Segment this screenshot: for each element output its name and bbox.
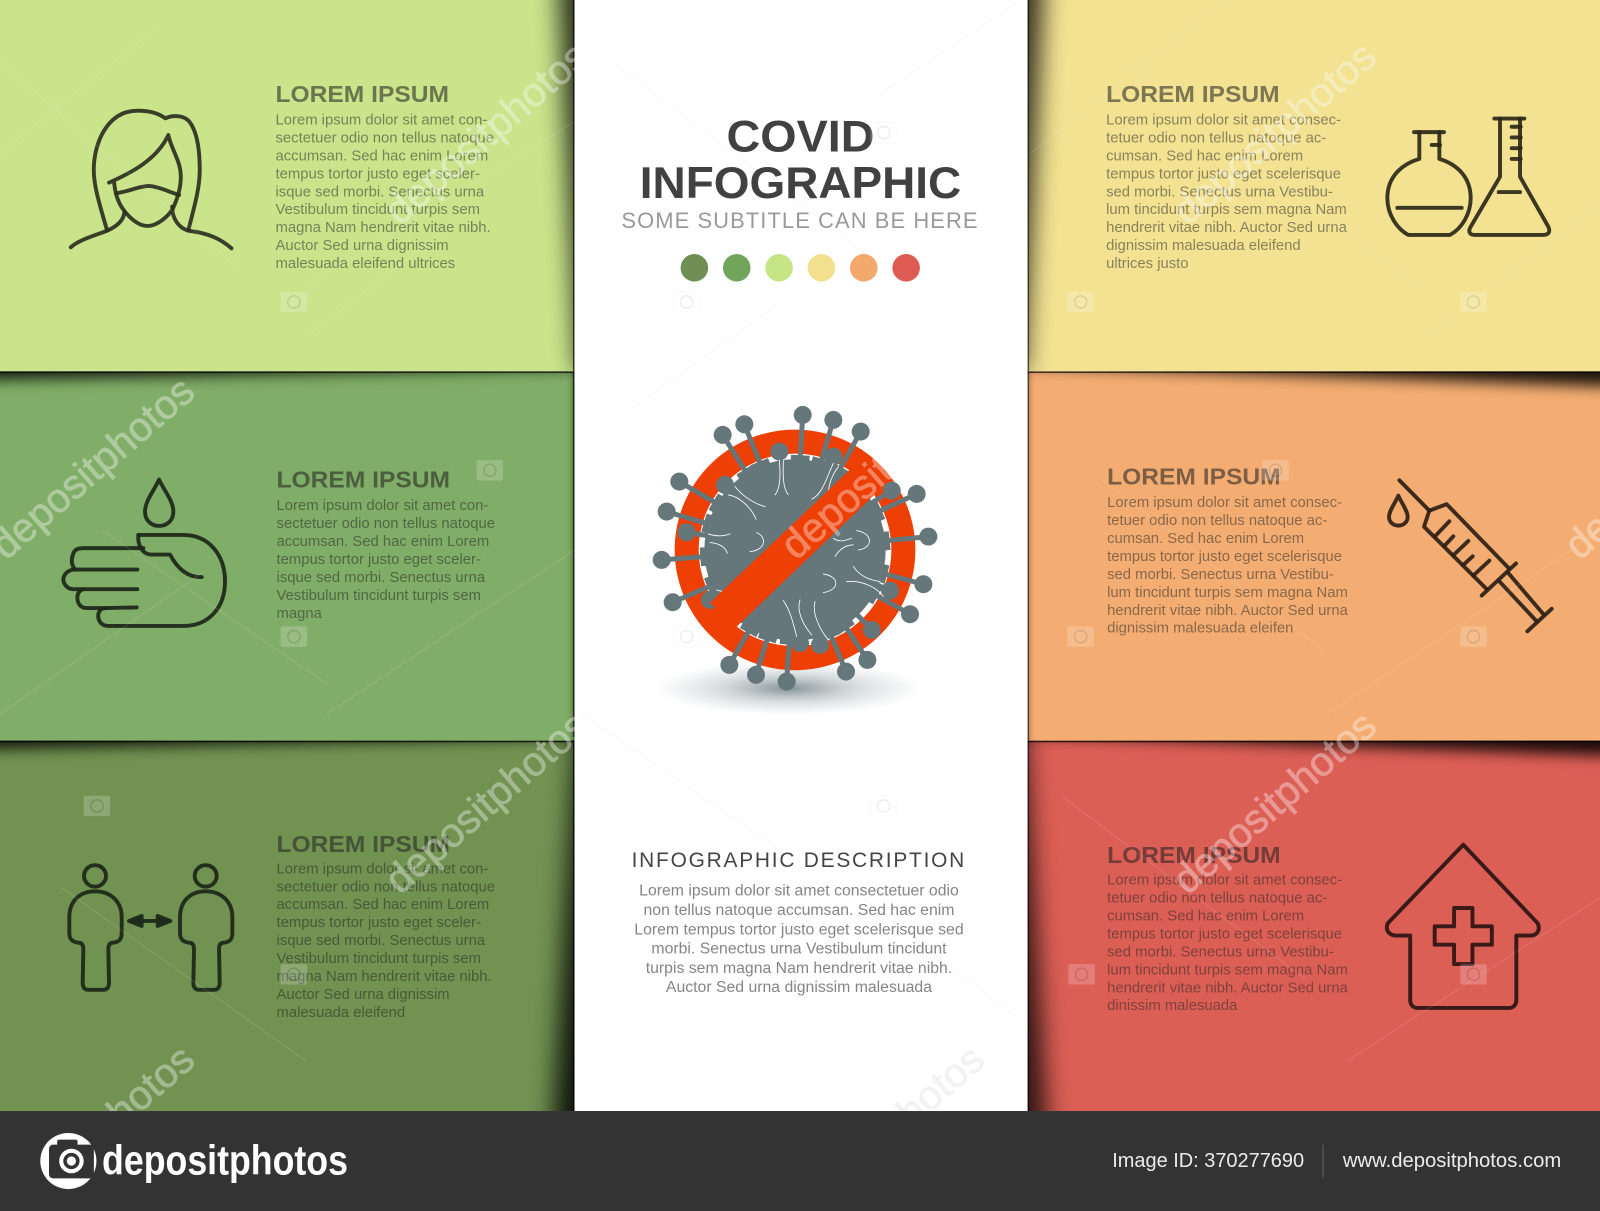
description text: morbi. Senectus urna Vestibulum tincidunt [651, 941, 947, 958]
heading: panel 6: LOREM IPSUM [1107, 842, 1281, 868]
watermark overlay: depositphotos [376, 33, 597, 233]
watermark overlay: depositphotos [376, 702, 597, 903]
text block: panel 6: cumsan. Sed hac enim Lorem [1107, 908, 1304, 924]
panel: face mask (light green) [0, 0, 574, 372]
footer bar [0, 1111, 1600, 1211]
text block: panel 4: sed morbi. Senectus urna Vestibu- [1106, 184, 1333, 200]
text block: panel 1: magna Nam hendrerit vitae nibh. [276, 220, 491, 236]
text block: panel 2: tempus tortor justo eget sceler- [277, 552, 481, 568]
watermark overlay: depositphotos [1163, 33, 1385, 233]
description text: non tellus natoque accumsan. Sed hac enim [644, 902, 954, 919]
text block: panel 3: Vestibulum tincidunt turpis sem [277, 951, 481, 967]
text block: panel 5: lum tincidunt turpis sem magna Nam [1107, 585, 1348, 601]
description text: turpis sem magna Nam hendrerit vitae nibh. [646, 960, 952, 977]
text block: panel 4: Lorem ipsum dolor sit amet consec- [1106, 112, 1341, 128]
heading: panel 1: LOREM IPSUM [276, 81, 449, 107]
text block: panel 4: tetuer odio non tellus natoque ac- [1106, 130, 1326, 146]
panel: vaccine (orange) [1028, 371, 1600, 741]
panel: home care (red) [1028, 740, 1600, 1111]
icon: woman wearing mask [71, 111, 232, 248]
icon: house with medical cross [1387, 845, 1539, 1008]
heading: panel 3: LOREM IPSUM [277, 831, 450, 857]
text block: panel 1: sectetuer odio non tellus natoque [276, 130, 494, 146]
colour dots legend [681, 254, 920, 282]
text block: panel 2: Vestibulum tincidunt turpis sem [277, 588, 481, 604]
text block: panel 4: dignissim malesuada eleifend [1106, 238, 1301, 254]
text block: panel 5: tempus tortor justo eget scelerisque [1107, 549, 1342, 565]
icon: depositphotos logo [40, 1133, 96, 1189]
text block: panel 1: Lorem ipsum dolor sit amet con- [276, 112, 487, 128]
title: INFOGRAPHIC [640, 157, 961, 208]
panel: social distancing (dark green) [0, 740, 574, 1111]
text block: panel 1: isque sed morbi. Senectus urna [276, 184, 485, 200]
text block: panel 5: tetuer odio non tellus natoque ac- [1107, 513, 1327, 529]
panel: lab flasks (yellow) [1028, 0, 1600, 372]
image id: Image ID: 370277690 [1112, 1150, 1304, 1172]
text block: panel 4: ultrices justo [1106, 256, 1189, 272]
icon: two people keeping distance [69, 865, 232, 990]
icon: lab flasks [1387, 119, 1549, 235]
text block: panel 3: magna Nam hendrerit vitae nibh. [277, 969, 492, 985]
text block: panel 6: dinissim malesuada [1107, 998, 1238, 1014]
icon: crossed-out coronavirus [653, 406, 937, 715]
description heading: INFOGRAPHIC DESCRIPTION [632, 849, 964, 872]
text block: panel 3: sectetuer odio non tellus natoque [277, 879, 495, 895]
text block: panel 6: hendrerit vitae nibh. Auctor Sed urna [1107, 980, 1349, 996]
description text: Lorem ipsum dolor sit amet consectetuer odio [639, 883, 959, 900]
text block: panel 3: malesuada eleifend [277, 1005, 405, 1021]
text block: panel 4: lum tincidunt turpis sem magna Nam [1106, 202, 1347, 218]
text block: panel 1: accumsan. Sed hac enim Lorem [276, 148, 488, 164]
description text: Auctor Sed urna dignissim malesuada [666, 979, 932, 996]
panel: centre column [574, 0, 1028, 1111]
heading: panel 5: LOREM IPSUM [1107, 464, 1281, 490]
title [640, 111, 961, 208]
logo wordmark: depositphotos [102, 1136, 348, 1183]
watermark overlay: depositphotos [1163, 702, 1385, 903]
icon: hand with water drop [63, 480, 225, 626]
text block: panel 5: Lorem ipsum dolor sit amet consec- [1107, 495, 1342, 511]
text block: panel 2: isque sed morbi. Senectus urna [277, 570, 486, 586]
title: COVID [727, 111, 874, 162]
panel: hand washing (mid green) [0, 371, 574, 741]
watermark overlay: depositphotos [772, 367, 993, 568]
text block: panel 2: Lorem ipsum dolor sit amet con- [277, 498, 488, 514]
text block: panel 1: tempus tortor justo eget sceler- [276, 166, 480, 182]
text block: panel 3: tempus tortor justo eget sceler- [277, 915, 481, 931]
text block: panel 1: malesuada eleifend ultrices [276, 256, 455, 272]
text block: panel 3: isque sed morbi. Senectus urna [277, 933, 486, 949]
text block: panel 5: dignissim malesuada eleifen [1107, 621, 1293, 637]
text block: panel 2: sectetuer odio non tellus natoque [277, 516, 495, 532]
text block: panel 4: tempus tortor justo eget scelerisque [1106, 166, 1341, 182]
text block: panel 5: sed morbi. Senectus urna Vestibu- [1107, 567, 1334, 583]
text block: panel 6: Lorem ipsum dolor sit amet consec- [1107, 873, 1342, 889]
website url: www.depositphotos.com [1342, 1150, 1561, 1172]
text block: panel 6: lum tincidunt turpis sem magna Nam [1107, 962, 1348, 978]
text block: panel 2: magna [277, 606, 323, 622]
text block: panel 2: accumsan. Sed hac enim Lorem [277, 534, 489, 550]
text block: panel 6: tempus tortor justo eget scelerisque [1107, 926, 1342, 942]
text block: panel 1: Vestibulum tincidunt turpis sem [276, 202, 480, 218]
text block: panel 4: hendrerit vitae nibh. Auctor Sed urna [1106, 220, 1348, 236]
icon: syringe [1389, 480, 1552, 631]
heading: panel 2: LOREM IPSUM [277, 467, 450, 493]
text block: panel 6: sed morbi. Senectus urna Vestibu- [1107, 944, 1334, 960]
text block: panel 3: Auctor Sed urna dignissim [277, 987, 450, 1003]
text block: panel 6: tetuer odio non tellus natoque ac- [1107, 890, 1327, 906]
text block: panel 3: Lorem ipsum dolor sit amet con- [277, 861, 488, 877]
text block: panel 4: cumsan. Sed hac enim Lorem [1106, 148, 1303, 164]
text block: panel 3: accumsan. Sed hac enim Lorem [277, 897, 489, 913]
text block: panel 1: Auctor Sed urna dignissim [276, 238, 449, 254]
description text: Lorem tempus tortor justo eget scelerisque sed [634, 921, 964, 938]
heading: panel 4: LOREM IPSUM [1106, 81, 1280, 107]
text block: panel 5: cumsan. Sed hac enim Lorem [1107, 531, 1304, 547]
subtitle: SOME SUBTITLE CAN BE HERE [621, 208, 978, 233]
text block: panel 5: hendrerit vitae nibh. Auctor Sed urna [1107, 603, 1349, 619]
